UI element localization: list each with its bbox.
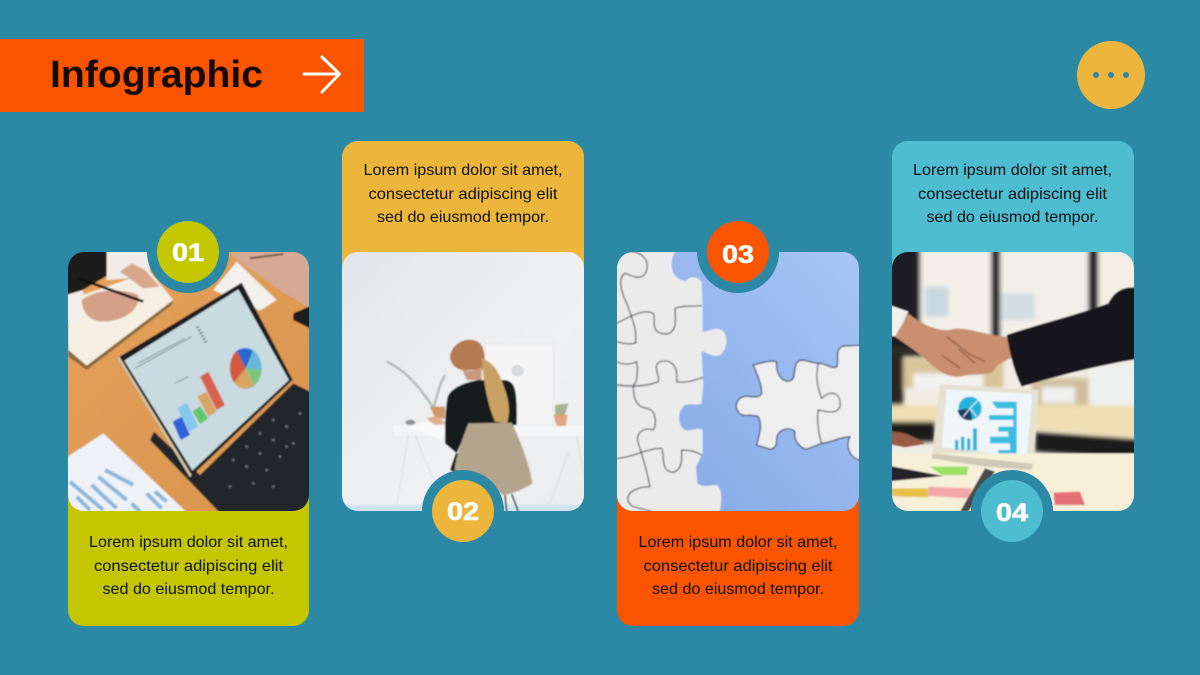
panel: step 02 — [335, 141, 592, 552]
caption text 01: consectetur adipiscing elit — [94, 558, 284, 575]
number badge 03 — [697, 211, 779, 293]
caption panel 03 — [617, 470, 859, 626]
caption text 02: consectetur adipiscing elit — [368, 186, 558, 203]
caption text 04: Lorem ipsum dolor sit amet, — [913, 162, 1112, 179]
photo: puzzle pieces — [617, 252, 859, 511]
number badge 01: 01 — [172, 239, 204, 267]
caption panel 02 — [342, 141, 584, 291]
caption text 03: Lorem ipsum dolor sit amet, — [638, 534, 838, 551]
caption text 04: consectetur adipiscing elit — [918, 186, 1108, 203]
number badge 02 — [422, 470, 504, 552]
caption text 02: Lorem ipsum dolor sit amet, — [364, 162, 562, 179]
title banner — [0, 39, 364, 112]
icon: arrow — [304, 57, 340, 92]
caption text 01: sed do eiusmod tempor. — [102, 581, 274, 598]
caption text 03: consectetur adipiscing elit — [644, 558, 833, 575]
number badge 03: 03 — [722, 241, 754, 269]
icon: menu dots badge — [1077, 41, 1145, 109]
caption text 02: sed do eiusmod tempor. — [377, 209, 549, 226]
panel: step 01 — [60, 211, 317, 626]
number badge 01 — [147, 211, 229, 293]
photo: tablet on desk — [68, 252, 309, 511]
panel: step 04 — [885, 141, 1142, 552]
caption text 03: sed do eiusmod tempor. — [652, 581, 824, 598]
number badge 04 — [971, 470, 1053, 552]
caption text 01: Lorem ipsum dolor sit amet, — [89, 534, 288, 551]
panel: step 03 — [610, 211, 867, 626]
caption panel 01 — [68, 470, 309, 626]
caption panel 04 — [892, 141, 1134, 291]
caption text 04: sed do eiusmod tempor. — [926, 209, 1098, 226]
number badge 04: 04 — [996, 499, 1028, 527]
photo: woman at desk — [342, 252, 584, 511]
number badge 02: 02 — [447, 498, 479, 526]
title: Infographic — [50, 54, 263, 96]
photo: handshake over tablet — [892, 252, 1134, 511]
